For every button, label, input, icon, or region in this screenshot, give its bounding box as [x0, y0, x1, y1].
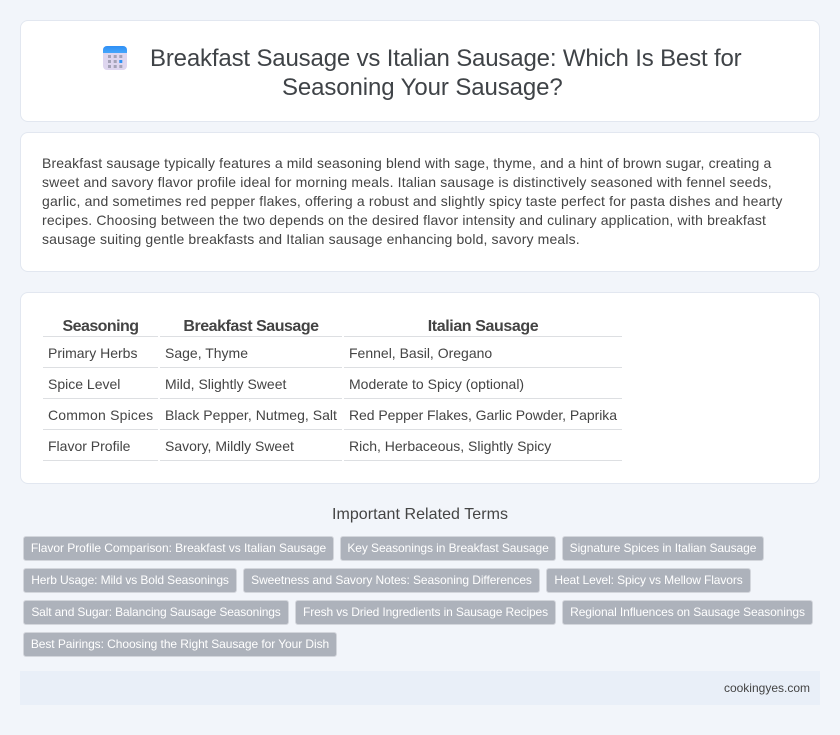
text block: intro: garlic, and sometimes red pepper flakes, offering a robust and slightly spicy taste perfect for pasta dishes and hearty	[42, 193, 783, 209]
tag list: related terms: Salt and Sugar: Balancing Sausage Seasonings	[31, 605, 281, 619]
tag list: related terms: Signature Spices in Italian Sausage	[570, 541, 756, 555]
table: seasoning comparison	[43, 318, 622, 461]
title	[150, 45, 742, 101]
table: seasoning comparison: Spice Level	[48, 376, 120, 392]
tag list: related terms: Regional Influences on Sausage Seasonings	[570, 605, 805, 619]
panel: title header	[20, 20, 820, 122]
footer bar	[20, 671, 820, 705]
footer source text: cookingyes.com	[724, 681, 810, 695]
tag list: related terms: Heat Level: Spicy vs Mellow Flavors	[554, 573, 743, 587]
text block: intro: Breakfast sausage typically features a mild seasoning blend with sage, thyme, and a hint of brown sugar, creating a	[42, 155, 771, 171]
tag list: related terms: Best Pairings: Choosing the Right Sausage for Your Dish	[31, 637, 329, 651]
text block: intro: recipes. Choosing between the two depends on the desired flavor intensity and culinary application, with breakfast	[42, 212, 766, 228]
table: seasoning comparison: Sage, Thyme	[165, 345, 248, 361]
panel: comparison table	[20, 292, 820, 484]
table: seasoning comparison: Black Pepper, Nutmeg, Salt	[165, 407, 337, 423]
table: seasoning comparison: Mild, Slightly Sweet	[165, 376, 286, 392]
text block: intro	[42, 155, 783, 247]
text block: intro: sausage suiting gentle breakfasts and Italian sausage enhancing bold, savory meals.	[42, 231, 580, 247]
table: seasoning comparison: Italian Sausage	[428, 318, 538, 335]
heading: important related terms: Important Related Terms	[332, 506, 508, 523]
tag list: related terms	[23, 536, 813, 657]
table: seasoning comparison: Flavor Profile	[48, 438, 130, 454]
table: seasoning comparison: Savory, Mildly Sweet	[165, 438, 294, 454]
tag list: related terms: Herb Usage: Mild vs Bold Seasonings	[31, 573, 229, 587]
title: Breakfast Sausage vs Italian Sausage: Which Is Best for	[150, 45, 742, 72]
tag list: related terms: Flavor Profile Comparison: Breakfast vs Italian Sausage	[31, 541, 326, 555]
tag list: related terms: Sweetness and Savory Notes: Seasoning Differences	[251, 573, 532, 587]
table: seasoning comparison: Primary Herbs	[48, 345, 137, 361]
table: seasoning comparison: Rich, Herbaceous, Slightly Spicy	[349, 438, 551, 454]
table: seasoning comparison: Common Spices	[48, 407, 153, 423]
tag list: related terms: Key Seasonings in Breakfast Sausage	[347, 541, 549, 555]
table: seasoning comparison: Breakfast Sausage	[183, 318, 319, 335]
icon: calendar	[103, 46, 127, 70]
table: seasoning comparison: Seasoning	[63, 318, 138, 335]
panel: intro paragraph	[20, 132, 820, 272]
table: seasoning comparison: Moderate to Spicy (optional)	[349, 376, 524, 392]
text block: intro: sweet and savory flavor profile ideal for morning meals. Italian sausage is distinctively seasoned with fennel seeds,	[42, 174, 772, 190]
table: seasoning comparison: Red Pepper Flakes, Garlic Powder, Paprika	[349, 407, 617, 423]
tag list: related terms: Fresh vs Dried Ingredients in Sausage Recipes	[303, 605, 548, 619]
title: Seasoning Your Sausage?	[282, 74, 563, 101]
table: seasoning comparison: Fennel, Basil, Oregano	[349, 345, 492, 361]
